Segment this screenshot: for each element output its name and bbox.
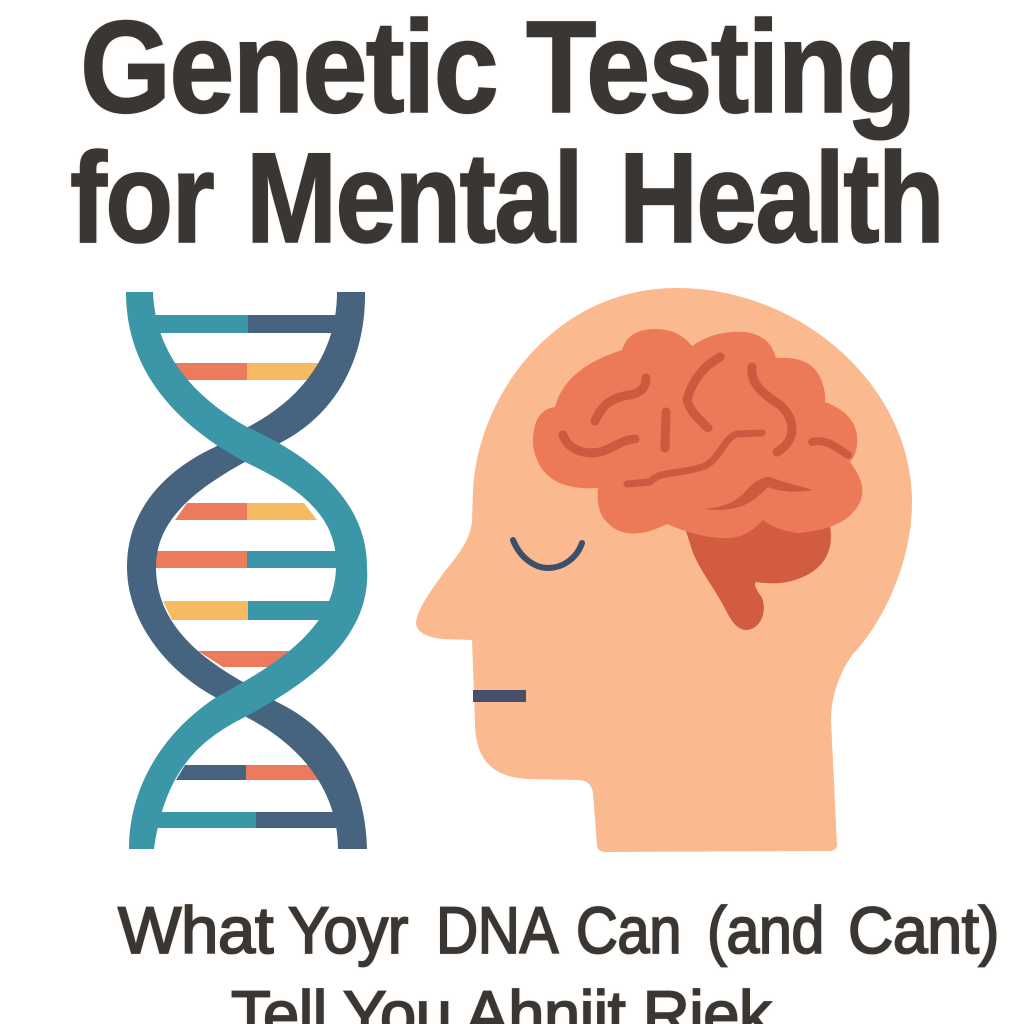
cerebrum (533, 329, 862, 538)
icon: head profile (416, 288, 912, 852)
brain folds (563, 357, 848, 510)
title (70, 0, 943, 270)
title: Mental (246, 127, 582, 270)
icon: DNA double helix (126, 292, 367, 849)
title: Health (619, 127, 943, 270)
subtitle: DNA (436, 893, 558, 967)
subtitle: Cant) (848, 893, 999, 967)
icon: closed eye (513, 540, 582, 568)
cerebellum (685, 515, 831, 630)
rungs of the helix (150, 315, 345, 828)
title: for (70, 127, 213, 270)
teal strand (126, 292, 367, 849)
subtitle: Yoyr (288, 893, 408, 967)
icon: mouth (473, 690, 526, 702)
navy strand (127, 292, 367, 849)
icon: brain (533, 329, 862, 630)
subtitle: Can (576, 893, 681, 967)
subtitle (118, 893, 999, 1024)
subtitle: (and (707, 893, 824, 967)
subtitle: What (118, 893, 273, 967)
